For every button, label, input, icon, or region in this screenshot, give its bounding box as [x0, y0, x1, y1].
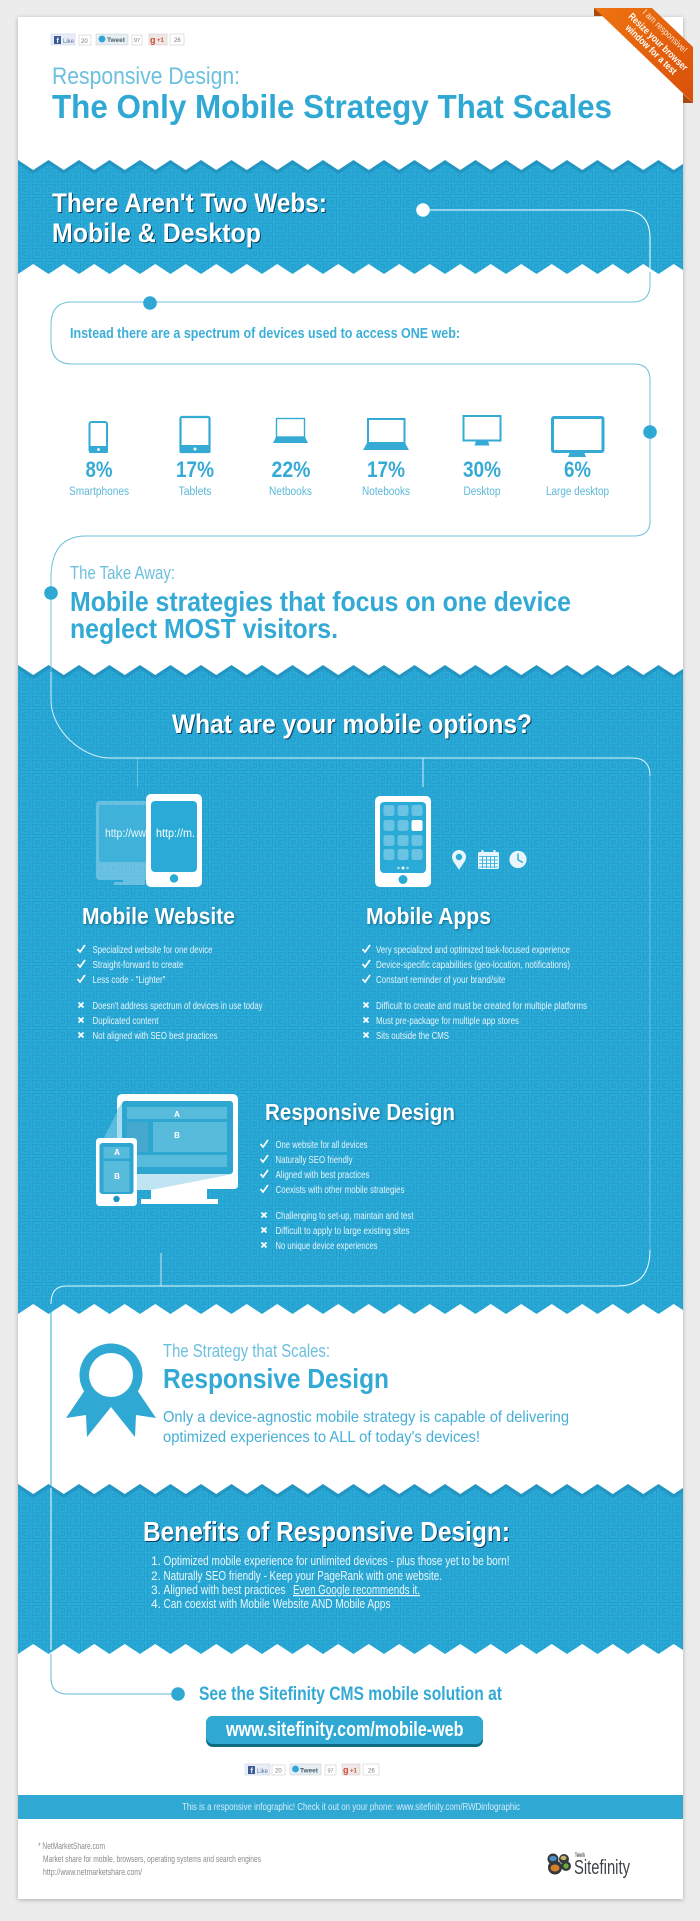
icon: desktop — [464, 416, 500, 446]
icon: responsive devices: A — [174, 1110, 180, 1119]
icon: mobile website: http://ww — [105, 826, 146, 840]
text: strategy that scales: Only a device-agnostic mobile strategy is capable of delivering — [163, 1409, 569, 1426]
text: take away: Mobile strategies that focus on one device — [70, 586, 571, 617]
list: benefits: Naturally SEO friendly - Keep your PageRank with one website. — [164, 1569, 442, 1583]
stat: large desktop: Large desktop — [546, 486, 609, 498]
title: Responsive Design: — [52, 63, 240, 90]
icon: responsive devices: B — [174, 1131, 180, 1140]
footer bar — [18, 1795, 683, 1819]
list: benefits: Can coexist with Mobile Website AND Mobile Apps — [164, 1597, 390, 1611]
stat: netbooks: Netbooks — [269, 486, 312, 498]
list: mobile apps: Must pre-package for multiple app stores — [376, 1016, 519, 1027]
social buttons top: Like — [63, 39, 75, 45]
list: responsive design: No unique device experiences — [276, 1241, 378, 1252]
heading: mobile options: What are your mobile options? — [172, 709, 532, 739]
stat: tablets: 17% — [176, 457, 214, 482]
stat: netbooks: 22% — [272, 457, 310, 482]
icon: calendar — [478, 850, 499, 869]
list: benefits: 1. — [151, 1554, 161, 1568]
stat: notebooks — [362, 457, 410, 498]
list: benefits: 4. — [151, 1597, 161, 1611]
corner ribbon: I am responsive! — [641, 7, 689, 55]
text: strategy that scales: optimized experiences to ALL of today's devices! — [163, 1429, 480, 1446]
list: mobile website: Duplicated content — [92, 1016, 159, 1027]
icon: mobile apps phone — [375, 796, 431, 887]
stat: notebooks: 17% — [367, 457, 405, 482]
social buttons bottom: +1 — [350, 1768, 358, 1774]
list: benefits: Optimized mobile experience for unlimited devices - plus those yet to be born! — [164, 1554, 510, 1568]
stat: desktop: Desktop — [464, 486, 500, 498]
heading: there aren't two webs: There Aren't Two Webs: — [52, 188, 327, 218]
stat: large desktop: 6% — [564, 457, 591, 482]
footer bar: This is a responsive infographic! Check it out on your phone: www.sitefinity.com/RWDinfographic — [182, 1801, 520, 1813]
heading: there aren't two webs — [52, 188, 327, 248]
call to action text: See the Sitefinity CMS mobile solution at — [199, 1684, 503, 1705]
icon: responsive devices — [96, 1094, 238, 1206]
stat: netbooks — [269, 457, 312, 498]
stat: large desktop — [546, 457, 609, 498]
list: mobile apps: Sits outside the CMS — [376, 1031, 449, 1042]
list: mobile apps: Difficult to create and must be created for multiple platforms — [376, 1001, 587, 1012]
social buttons top — [51, 34, 184, 45]
list: responsive design: Naturally SEO friendly — [276, 1155, 352, 1166]
band: benefits — [18, 1484, 683, 1654]
heading: there aren't two webs: Mobile & Desktop — [52, 218, 261, 248]
icon: responsive devices: A — [114, 1148, 120, 1157]
footnotes: * NetMarketShare.com — [38, 1841, 105, 1852]
device stats — [69, 416, 609, 498]
list: responsive design: Aligned with best practices — [276, 1170, 370, 1181]
heading: benefits: Benefits of Responsive Design: — [143, 1516, 510, 1547]
list: responsive design — [260, 1140, 414, 1252]
list: benefits: 3. — [151, 1583, 161, 1597]
social buttons bottom: 20 — [275, 1768, 282, 1774]
social buttons top: 97 — [134, 38, 140, 44]
icon: notebook — [363, 419, 409, 450]
icon: tablet — [180, 417, 210, 453]
footnotes: Market share for mobile, browsers, operating systems and search engines — [43, 1854, 261, 1865]
stat: tablets: Tablets — [178, 486, 212, 498]
social buttons bottom: Like — [257, 1769, 269, 1775]
heading: responsive design: Responsive Design — [265, 1099, 455, 1125]
text: strategy that scales: Responsive Design — [163, 1363, 389, 1394]
heading: mobile website: Mobile Website — [82, 903, 235, 929]
icon: mobile website — [96, 794, 202, 887]
list: responsive design: Difficult to apply to large existing sites — [276, 1226, 410, 1237]
icon: location pin — [452, 850, 466, 870]
social buttons bottom: g — [343, 1765, 348, 1775]
list: benefits: Aligned with best practices — [164, 1583, 286, 1597]
list: mobile website — [78, 945, 262, 1042]
icon: clock — [509, 851, 527, 868]
list: responsive design: Challenging to set-up, maintain and test — [276, 1211, 414, 1222]
social buttons bottom: f — [250, 1768, 254, 1775]
logo: sitefinity: Telerik — [575, 1853, 585, 1859]
footnotes — [38, 1841, 261, 1878]
text: spectrum intro: Instead there are a spectrum of devices used to access ONE web: — [70, 326, 460, 342]
list: mobile apps: Device-specific capabilities (geo-location, notifications) — [376, 960, 570, 971]
list: mobile apps: Constant reminder of your brand/site — [376, 975, 506, 986]
corner ribbon — [594, 7, 693, 103]
title: The Only Mobile Strategy That Scales — [52, 88, 612, 125]
stat: smartphones: Smartphones — [69, 486, 129, 498]
list: responsive design: One website for all devices — [276, 1140, 368, 1151]
list: mobile website: Straight-forward to create — [92, 960, 184, 971]
list: mobile apps: Very specialized and optimized task-focused experience — [376, 945, 570, 956]
list: mobile website: Less code - "Lighter" — [92, 975, 166, 986]
list: mobile website: Doesn't address spectrum of devices in use today — [92, 1001, 262, 1012]
icon: responsive devices: B — [114, 1172, 120, 1181]
list: benefits — [151, 1554, 510, 1611]
text: take away: neglect MOST visitors. — [70, 613, 338, 644]
footnotes: http://www.netmarketshare.com/ — [43, 1867, 142, 1878]
text: take away — [70, 563, 571, 644]
social buttons bottom: 26 — [368, 1768, 375, 1774]
icon: smartphone — [89, 422, 108, 453]
list: mobile website: Not aligned with SEO best practices — [92, 1031, 218, 1042]
text: strategy that scales: The Strategy that Scales: — [163, 1341, 330, 1361]
logo: sitefinity — [548, 1853, 630, 1879]
band: mobile options — [18, 665, 683, 1314]
social buttons top: +1 — [157, 38, 165, 44]
stat: tablets — [176, 457, 214, 498]
stat: smartphones — [69, 457, 129, 498]
connector dots — [44, 203, 657, 1701]
icon: mobile website: http://m. — [156, 826, 195, 840]
social buttons top: Tweet — [107, 37, 126, 44]
list: benefits: Even Google recommends it. — [293, 1583, 420, 1597]
text: strategy that scales — [163, 1341, 569, 1446]
text: take away: The Take Away: — [70, 563, 175, 583]
list: responsive design: Coexists with other mobile strategies — [276, 1185, 404, 1196]
social buttons bottom: Tweet — [300, 1768, 319, 1774]
icon: award ribbon — [66, 1344, 156, 1437]
corner ribbon: window for a test — [622, 22, 679, 78]
social buttons top: 26 — [174, 38, 181, 44]
social buttons bottom: 97 — [328, 1768, 334, 1774]
social buttons top: g — [150, 35, 156, 45]
list: mobile website: Specialized website for one device — [92, 945, 213, 956]
stat: desktop: 30% — [463, 457, 501, 482]
icon: large desktop — [552, 418, 603, 457]
list: benefits: 2. — [151, 1569, 161, 1583]
icon: netbook — [273, 418, 308, 443]
stat: smartphones: 8% — [86, 457, 112, 482]
social buttons top: 20 — [81, 39, 88, 45]
stat: desktop — [463, 457, 501, 498]
stat: notebooks: Notebooks — [362, 486, 410, 498]
connector line — [51, 210, 650, 1694]
logo: sitefinity: Sitefinity — [574, 1857, 630, 1879]
list: mobile apps — [362, 945, 587, 1042]
button: sitefinity url: www.sitefinity.com/mobile-web — [225, 1719, 464, 1741]
title — [52, 63, 612, 125]
social buttons bottom — [245, 1764, 379, 1775]
button: sitefinity url — [206, 1716, 483, 1747]
heading: mobile apps: Mobile Apps — [366, 903, 491, 929]
social buttons top: f — [56, 38, 60, 45]
band: two webs — [18, 160, 683, 274]
